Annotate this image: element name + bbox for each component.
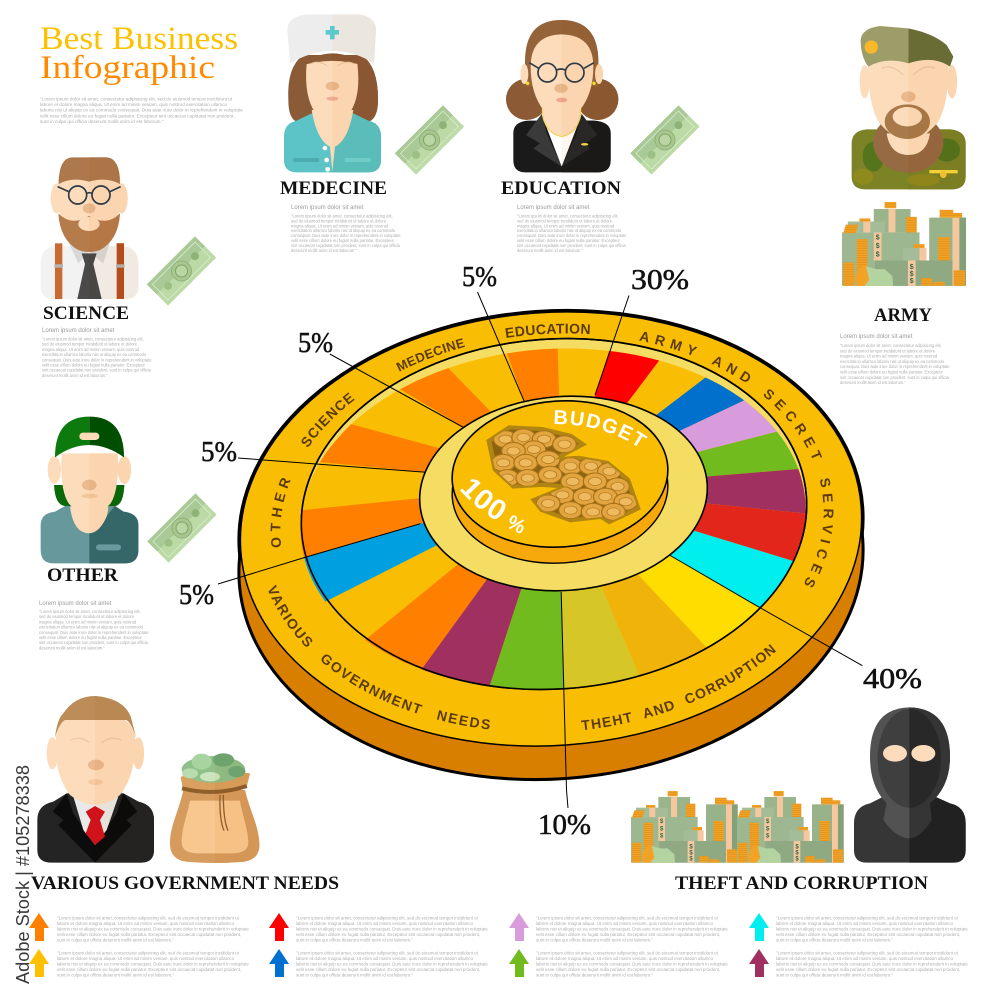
legend: text blocks: sunt in culpa qui officia deserunt mollit anim id est laborum." <box>776 938 893 942</box>
heading: medecine: MEDECINE <box>280 178 387 199</box>
text block: army: consequat. Duis aute irure dolor in reprehenderit in voluptate <box>840 364 950 369</box>
text block: medecine: magna aliqua. Ut enim ad minim veniam, quis nostrud <box>291 223 388 228</box>
legend: text blocks: sunt in culpa qui officia deserunt mollit anim id est laborum." <box>296 938 413 942</box>
legend: text blocks: "Lorem ipsum dolor sit amet, consectetur adipisicing elit, sed do eiusmod tempor incididunt ut <box>296 916 479 920</box>
icon: money stack army: $ <box>910 271 914 278</box>
character: masked thief <box>854 707 966 863</box>
icon: money stacks theft: $ <box>689 850 693 856</box>
title: Best Business <box>40 21 238 57</box>
legend: text blocks: velit esse cillum dolore eu fugiat nulla pariatur. Excepteur sint occaecat cupidatat non proident, <box>536 932 720 937</box>
text block: army: sint occaecat cupidatat non proident, sunt in culpa qui officia <box>840 375 949 380</box>
leader lines <box>218 292 862 808</box>
text block: science: deserunt mollit anim id est laborum." <box>42 373 108 378</box>
legend: text blocks: laboris nisi ut aliquip ex ea commodo consequat. Duis aute irure dolor in reprehenderit in voluptate <box>536 926 728 932</box>
text block: other: exercitation ullamco laboris nisi ut aliquip ex ea commodo <box>39 625 144 630</box>
text block: other <box>39 601 149 650</box>
icon: money stacks theft: $ <box>660 834 664 840</box>
legend: text blocks: velit esse cillum dolore eu fugiat nulla pariatur. Excepteur sint occaecat cupidatat non proident, <box>57 967 241 972</box>
inner ring <box>289 322 819 706</box>
legend: text blocks: velit esse cillum dolore eu fugiat nulla pariatur. Excepteur sint occaecat cupidatat non proident, <box>296 967 480 972</box>
legend: text blocks: sunt in culpa qui officia deserunt mollit anim id est laborum." <box>296 972 413 978</box>
legend: text blocks: sunt in culpa qui officia deserunt mollit anim id est laborum." <box>776 972 893 978</box>
intro text block: velit esse cillum dolore eu fugiat nulla pariatur. Excepteur sint occaecat cupidatat non proident, <box>40 113 235 118</box>
heading: various government needs: VARIOUS GOVERNMENT NEEDS <box>31 873 339 894</box>
legend: text blocks: labore et dolore magna aliqua. Ut enim ad minim veniam, quis nostrud exercitation ullamco <box>776 921 954 926</box>
icon: money stacks theft: $ <box>689 856 693 862</box>
legend: text blocks: velit esse cillum dolore eu fugiat nulla pariatur. Excepteur sint occaecat cupidatat non proident, <box>776 932 960 937</box>
disc segment labels <box>268 324 834 730</box>
icon: banknote other <box>147 493 217 563</box>
legend: text blocks: "Lorem ipsum dolor sit amet, consectetur adipisicing elit, sed do eiusmod tempor incididunt ut <box>776 950 959 956</box>
icon: money stacks theft: $ <box>795 844 799 850</box>
legend: text blocks: velit esse cillum dolore eu fugiat nulla pariatur. Excepteur sint occaecat cupidatat non proident, <box>776 967 960 972</box>
legend: text blocks: laboris nisi ut aliquip ex ea commodo consequat. Duis aute irure dolor in reprehenderit in voluptate <box>536 962 728 966</box>
text block: other: velit esse cillum dolore eu fugiat nulla pariatur. Excepteur <box>39 635 143 640</box>
text block: medecine: sint occaecat cupidatat non proident, sunt in culpa qui officia <box>291 243 400 248</box>
icon: money stacks theft: $ <box>660 826 664 832</box>
text block: science: magna aliqua. Ut enim ad minim veniam, quis nostrud <box>42 347 139 352</box>
icon: money stacks theft: $ <box>660 819 664 825</box>
legend: text blocks: sunt in culpa qui officia deserunt mollit anim id est laborum." <box>57 938 174 942</box>
legend: text blocks: sunt in culpa qui officia deserunt mollit anim id est laborum." <box>536 972 653 978</box>
disc segment labels: ARMY AND SECRET SERVICES <box>639 332 834 588</box>
text block: army: sed do eiusmod tempor incididunt ut labore et dolore <box>840 348 936 353</box>
intro text block: laboris nisi ut aliquip ex ea commodo consequat. Duis aute irure dolor in reprehenderit in voluptate <box>40 108 243 113</box>
text block: other: magna aliqua. Ut enim ad minim veniam, quis nostrud <box>39 619 136 624</box>
legend: text blocks <box>57 916 968 978</box>
text block: army: velit esse cillum dolore eu fugiat nulla pariatur. Excepteur <box>840 370 944 374</box>
icon: money stack army: $ <box>910 264 914 271</box>
disc segment labels: THEHT AND CORRUPTION <box>581 644 776 730</box>
heading: theft and corruption: THEFT AND CORRUPTION <box>675 873 928 894</box>
title <box>40 21 238 86</box>
heading: science: SCIENCE <box>43 303 129 324</box>
disc top face <box>226 291 876 767</box>
icon: money stack army: $ <box>876 252 880 259</box>
text block: other: sed do eiusmod tempor incididunt ut labore et dolore <box>39 614 135 619</box>
chart: budget disc <box>218 292 865 808</box>
icon: money stack army: $ <box>910 278 914 285</box>
icon: money stacks theft <box>631 791 844 863</box>
disc outline and side <box>226 291 876 799</box>
text block: medecine: "Lorem ipsum dolor sit amet, consectetur adipisicing elit, <box>291 214 393 218</box>
disc segment labels: VARIOUS GOVERNMENT NEEDS <box>268 584 490 730</box>
legend: text blocks: "Lorem ipsum dolor sit amet, consectetur adipisicing elit, sed do eiusmod tempor incididunt ut <box>536 950 719 956</box>
text block: education: "Lorem ipsum dolor sit amet, consectetur adipisicing elit, <box>517 214 619 218</box>
legend: text blocks: labore et dolore magna aliqua. Ut enim ad minim veniam, quis nostrud exercitation ullamco <box>57 921 235 926</box>
side credit text: Adobe Stock | #105278338 <box>13 765 33 984</box>
text block: education: sed do eiusmod tempor incididunt ut labore et dolore <box>517 218 613 223</box>
text block: education: consequat. Duis aute irure dolor in reprehenderit in voluptate <box>517 233 627 238</box>
text block: education: magna aliqua. Ut enim ad minim veniam, quis nostrud <box>517 223 614 228</box>
text block: medecine: sed do eiusmod tempor incididunt ut labore et dolore <box>291 218 387 223</box>
text block: other: sint occaecat cupidatat non proident, sunt in culpa qui officia <box>39 640 148 645</box>
text block: medecine: consequat. Duis aute irure dolor in reprehenderit in voluptate <box>291 233 401 238</box>
legend: text blocks: sunt in culpa qui officia deserunt mollit anim id est laborum." <box>57 972 174 978</box>
icon: dollar of coins <box>489 427 638 522</box>
legend: text blocks: labore et dolore magna aliqua. Ut enim ad minim veniam, quis nostrud exercitation ullamco <box>776 956 954 961</box>
label: 100 percent: 100 % <box>460 479 524 534</box>
icon: money stack army <box>842 202 966 286</box>
text block: education: Lorem ipsum dolor sit amet <box>517 205 590 211</box>
icon: banknote science <box>147 236 216 306</box>
text block: other: consequat. Duis aute irure dolor in reprehenderit in voluptate <box>39 630 149 635</box>
text block: army: magna aliqua. Ut enim ad minim veniam, quis nostrud <box>840 354 937 359</box>
text block: education: exercitation ullamco laboris nisi ut aliquip ex ea commodo <box>517 228 622 233</box>
icon: money stacks theft: $ <box>795 856 799 862</box>
legend: text blocks: velit esse cillum dolore eu fugiat nulla pariatur. Excepteur sint occaecat cupidatat non proident, <box>536 967 720 972</box>
text block: science: sed do eiusmod tempor incididunt ut labore et dolore <box>42 342 138 347</box>
legend: text blocks: "Lorem ipsum dolor sit amet, consectetur adipisicing elit, sed do eiusmod tempor incididunt ut <box>57 916 240 920</box>
icon: banknote medecine <box>395 105 464 175</box>
legend: text blocks: "Lorem ipsum dolor sit amet, consectetur adipisicing elit, sed do eiusmod tempor incididunt ut <box>536 916 719 920</box>
character: politician (various government needs) <box>37 696 154 863</box>
percent labels: 5% <box>462 262 497 293</box>
legend: text blocks: labore et dolore magna aliqua. Ut enim ad minim veniam, quis nostrud exercitation ullamco <box>536 921 714 926</box>
icon: money stacks theft: $ <box>766 834 770 840</box>
character: soldier (army) <box>852 26 966 189</box>
legend: text blocks: labore et dolore magna aliqua. Ut enim ad minim veniam, quis nostrud exercitation ullamco <box>536 956 714 961</box>
disc segment labels: MEDECINE <box>396 338 465 372</box>
legend: text blocks: "Lorem ipsum dolor sit amet, consectetur adipisicing elit, sed do eiusmod tempor incididunt ut <box>776 916 959 920</box>
text block: army: deserunt mollit anim id est laborum." <box>840 380 906 385</box>
legend: text blocks: laboris nisi ut aliquip ex ea commodo consequat. Duis aute irure dolor in reprehenderit in voluptate <box>296 926 488 932</box>
text block: science: "Lorem ipsum dolor sit amet, consectetur adipisicing elit, <box>42 336 144 342</box>
text block: science: sint occaecat cupidatat non proident, sunt in culpa qui officia <box>42 368 151 373</box>
text block: army: Lorem ipsum dolor sit amet <box>840 334 913 340</box>
coin side <box>447 410 673 570</box>
text block: army: "Lorem ipsum dolor sit amet, consectetur adipisicing elit, <box>840 343 942 348</box>
legend: text blocks: velit esse cillum dolore eu fugiat nulla pariatur. Excepteur sint occaecat cupidatat non proident, <box>57 932 241 937</box>
text block: education: velit esse cillum dolore eu fugiat nulla pariatur. Excepteur <box>517 238 621 243</box>
text block: science <box>42 328 152 378</box>
percent labels <box>179 262 922 841</box>
text block: medecine: velit esse cillum dolore eu fugiat nulla pariatur. Excepteur <box>291 238 395 243</box>
text block: medecine: exercitation ullamco laboris nisi ut aliquip ex ea commodo <box>291 228 396 233</box>
legend: text blocks: "Lorem ipsum dolor sit amet, consectetur adipisicing elit, sed do eiusmod tempor incididunt ut <box>57 950 240 956</box>
legend: text blocks: laboris nisi ut aliquip ex ea commodo consequat. Duis aute irure dolor in reprehenderit in voluptate <box>57 962 249 966</box>
legend: text blocks: laboris nisi ut aliquip ex ea commodo consequat. Duis aute irure dolor in reprehenderit in voluptate <box>57 926 249 932</box>
heading: army: ARMY <box>874 305 932 326</box>
text block: science: consequat. Duis aute irure dolor in reprehenderit in voluptate <box>42 357 152 362</box>
legend: text blocks: labore et dolore magna aliqua. Ut enim ad minim veniam, quis nostrud exercitation ullamco <box>296 956 474 961</box>
hub ring <box>413 387 714 600</box>
text block: medecine: deserunt mollit anim id est laborum." <box>291 248 357 253</box>
text block: science: Lorem ipsum dolor sit amet <box>42 328 115 334</box>
percent labels: 5% <box>298 328 333 359</box>
legend: text blocks: laboris nisi ut aliquip ex ea commodo consequat. Duis aute irure dolor in reprehenderit in voluptate <box>776 962 968 966</box>
text block: science: velit esse cillum dolore eu fugiat nulla pariatur. Excepteur <box>42 362 146 368</box>
character: young man in cap (other) <box>41 417 138 563</box>
intro text block: "Lorem ipsum dolor sit amet, consectetur adipisicing elit, sed do eiusmod tempor incididunt ut <box>40 96 233 102</box>
heading: other: OTHER <box>47 565 118 586</box>
character: scientist (science) <box>41 157 138 299</box>
icon: money stack army: $ <box>876 234 880 241</box>
character: nurse (medecine) <box>284 14 381 172</box>
icon: banknote education <box>630 105 700 175</box>
coin top <box>447 394 673 554</box>
text block: science: exercitation ullamco laboris nisi ut aliquip ex ea commodo <box>42 352 147 357</box>
disc segment labels: SCIENCE <box>302 392 355 447</box>
text block: other: "Lorem ipsum dolor sit amet, consectetur adipisicing elit, <box>39 609 141 614</box>
percent labels: 5% <box>201 437 237 468</box>
text block: army <box>840 334 950 385</box>
icon: money stacks theft: $ <box>766 819 770 825</box>
disc segment labels: EDUCATION <box>505 324 590 338</box>
legend: text blocks: sunt in culpa qui officia deserunt mollit anim id est laborum." <box>536 938 653 942</box>
heading: education: EDUCATION <box>501 178 621 199</box>
legend: text blocks: laboris nisi ut aliquip ex ea commodo consequat. Duis aute irure dolor in reprehenderit in voluptate <box>776 926 968 932</box>
text block: army: exercitation ullamco laboris nisi ut aliquip ex ea commodo <box>840 359 945 364</box>
legend: text blocks: labore et dolore magna aliqua. Ut enim ad minim veniam, quis nostrud exercitation ullamco <box>57 956 235 961</box>
text block: medecine <box>291 205 401 253</box>
intro text block: sunt in culpa qui officia deserunt mollit anim id est laborum." <box>40 119 164 124</box>
legend: text blocks: labore et dolore magna aliqua. Ut enim ad minim veniam, quis nostrud exercitation ullamco <box>296 921 474 926</box>
legend: text blocks: velit esse cillum dolore eu fugiat nulla pariatur. Excepteur sint occaecat cupidatat non proident, <box>296 932 480 937</box>
disc segment labels: OTHER <box>270 478 291 548</box>
legend: text blocks: "Lorem ipsum dolor sit amet, consectetur adipisicing elit, sed do eiusmod tempor incididunt ut <box>296 950 479 956</box>
budget wedges <box>300 348 806 689</box>
text block: medecine: Lorem ipsum dolor sit amet <box>291 205 364 211</box>
intro text block: labore et dolore magna aliqua. Ut enim ad minim veniam, quis nostrud exercitation ullamco <box>40 102 228 107</box>
text block: other: Lorem ipsum dolor sit amet <box>39 601 112 607</box>
percent labels: 5% <box>179 580 214 611</box>
icon: money stack army: $ <box>876 243 880 250</box>
text block: education: deserunt mollit anim id est laborum." <box>517 248 583 253</box>
text block: other: deserunt mollit anim id est laborum." <box>39 645 105 650</box>
title: Infographic <box>40 50 215 86</box>
text block: education: sint occaecat cupidatat non proident, sunt in culpa qui officia <box>517 243 626 248</box>
legend: text blocks: laboris nisi ut aliquip ex ea commodo consequat. Duis aute irure dolor in reprehenderit in voluptate <box>296 962 488 966</box>
disc side face <box>226 323 876 799</box>
icon: money stacks theft: $ <box>795 850 799 856</box>
percent labels: 40% <box>863 664 922 695</box>
icon: money sack <box>170 753 259 863</box>
percent labels: 30% <box>631 265 689 296</box>
icon: money stacks theft: $ <box>766 826 770 832</box>
text block: education <box>517 205 627 253</box>
percent labels: 10% <box>538 810 591 841</box>
icon: money stacks theft: $ <box>689 844 693 850</box>
label: budget: BUDGET <box>554 410 648 446</box>
legend: arrows <box>29 913 769 977</box>
character: teacher (education) <box>506 20 618 172</box>
